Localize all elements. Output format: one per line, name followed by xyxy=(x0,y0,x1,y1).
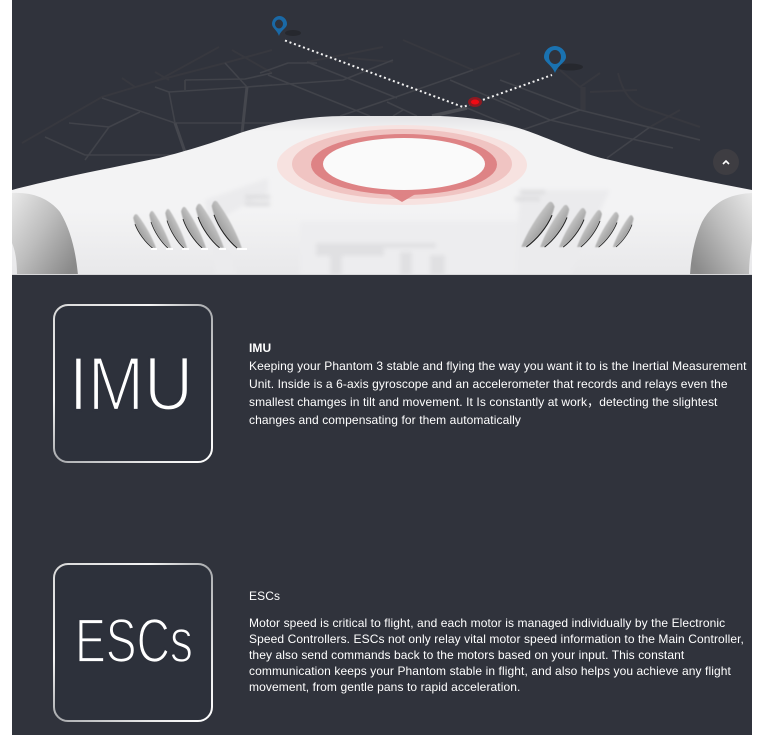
IMU rings xyxy=(277,125,527,205)
text block: ESCs xyxy=(249,589,744,694)
dotted flight path xyxy=(285,40,552,107)
bottom edge line xyxy=(12,274,752,275)
location pin: right xyxy=(544,46,583,73)
text block: IMU: changes and compensating for them automatically xyxy=(249,413,521,427)
text block: ESCs: Motor speed is critical to flight, and each motor is managed individually by the Electronic xyxy=(249,616,725,630)
card: IMU: IMU xyxy=(69,342,193,427)
text block: IMU: IMU xyxy=(249,341,271,355)
hero illustration: drone top with map xyxy=(12,16,752,275)
right motor arm xyxy=(690,193,752,275)
text block: IMU xyxy=(249,341,747,427)
text block: ESCs: communication keeps your Phantom stable in flight, and also helps you achieve any flight xyxy=(249,664,731,678)
map roads xyxy=(45,60,700,160)
red position marker xyxy=(468,97,482,107)
location pin: left xyxy=(272,16,301,36)
text block: IMU: Unit. Inside is a 6-axis gyroscope and an accelerometer that records and relays even the xyxy=(249,377,728,391)
text block: IMU: Keeping your Phantom 3 stable and flying the way you want it to is the Inertial Measurement xyxy=(249,359,747,373)
card: ESCs: ESCs xyxy=(75,607,193,676)
scroll-up button xyxy=(713,149,739,175)
left vents xyxy=(133,201,247,249)
left motor arm xyxy=(12,193,78,275)
right vents xyxy=(521,202,634,247)
text block: ESCs: they also send commands back to the motors based on your input. This constant xyxy=(249,648,684,662)
drone body xyxy=(12,116,752,275)
text block: ESCs: movement, from gentle pans to rapid acceleration. xyxy=(249,680,520,694)
card: ESCs xyxy=(54,564,212,721)
text block: IMU: smallest chamges in tilt and movement. It Is constantly at work，detecting the slightest xyxy=(249,395,717,409)
text block: ESCs: ESCs xyxy=(249,589,280,603)
faint body details xyxy=(242,190,548,272)
text block: ESCs: Speed Controllers. ESCs not only relay vital motor speed information to the Main Controller, xyxy=(249,632,744,646)
